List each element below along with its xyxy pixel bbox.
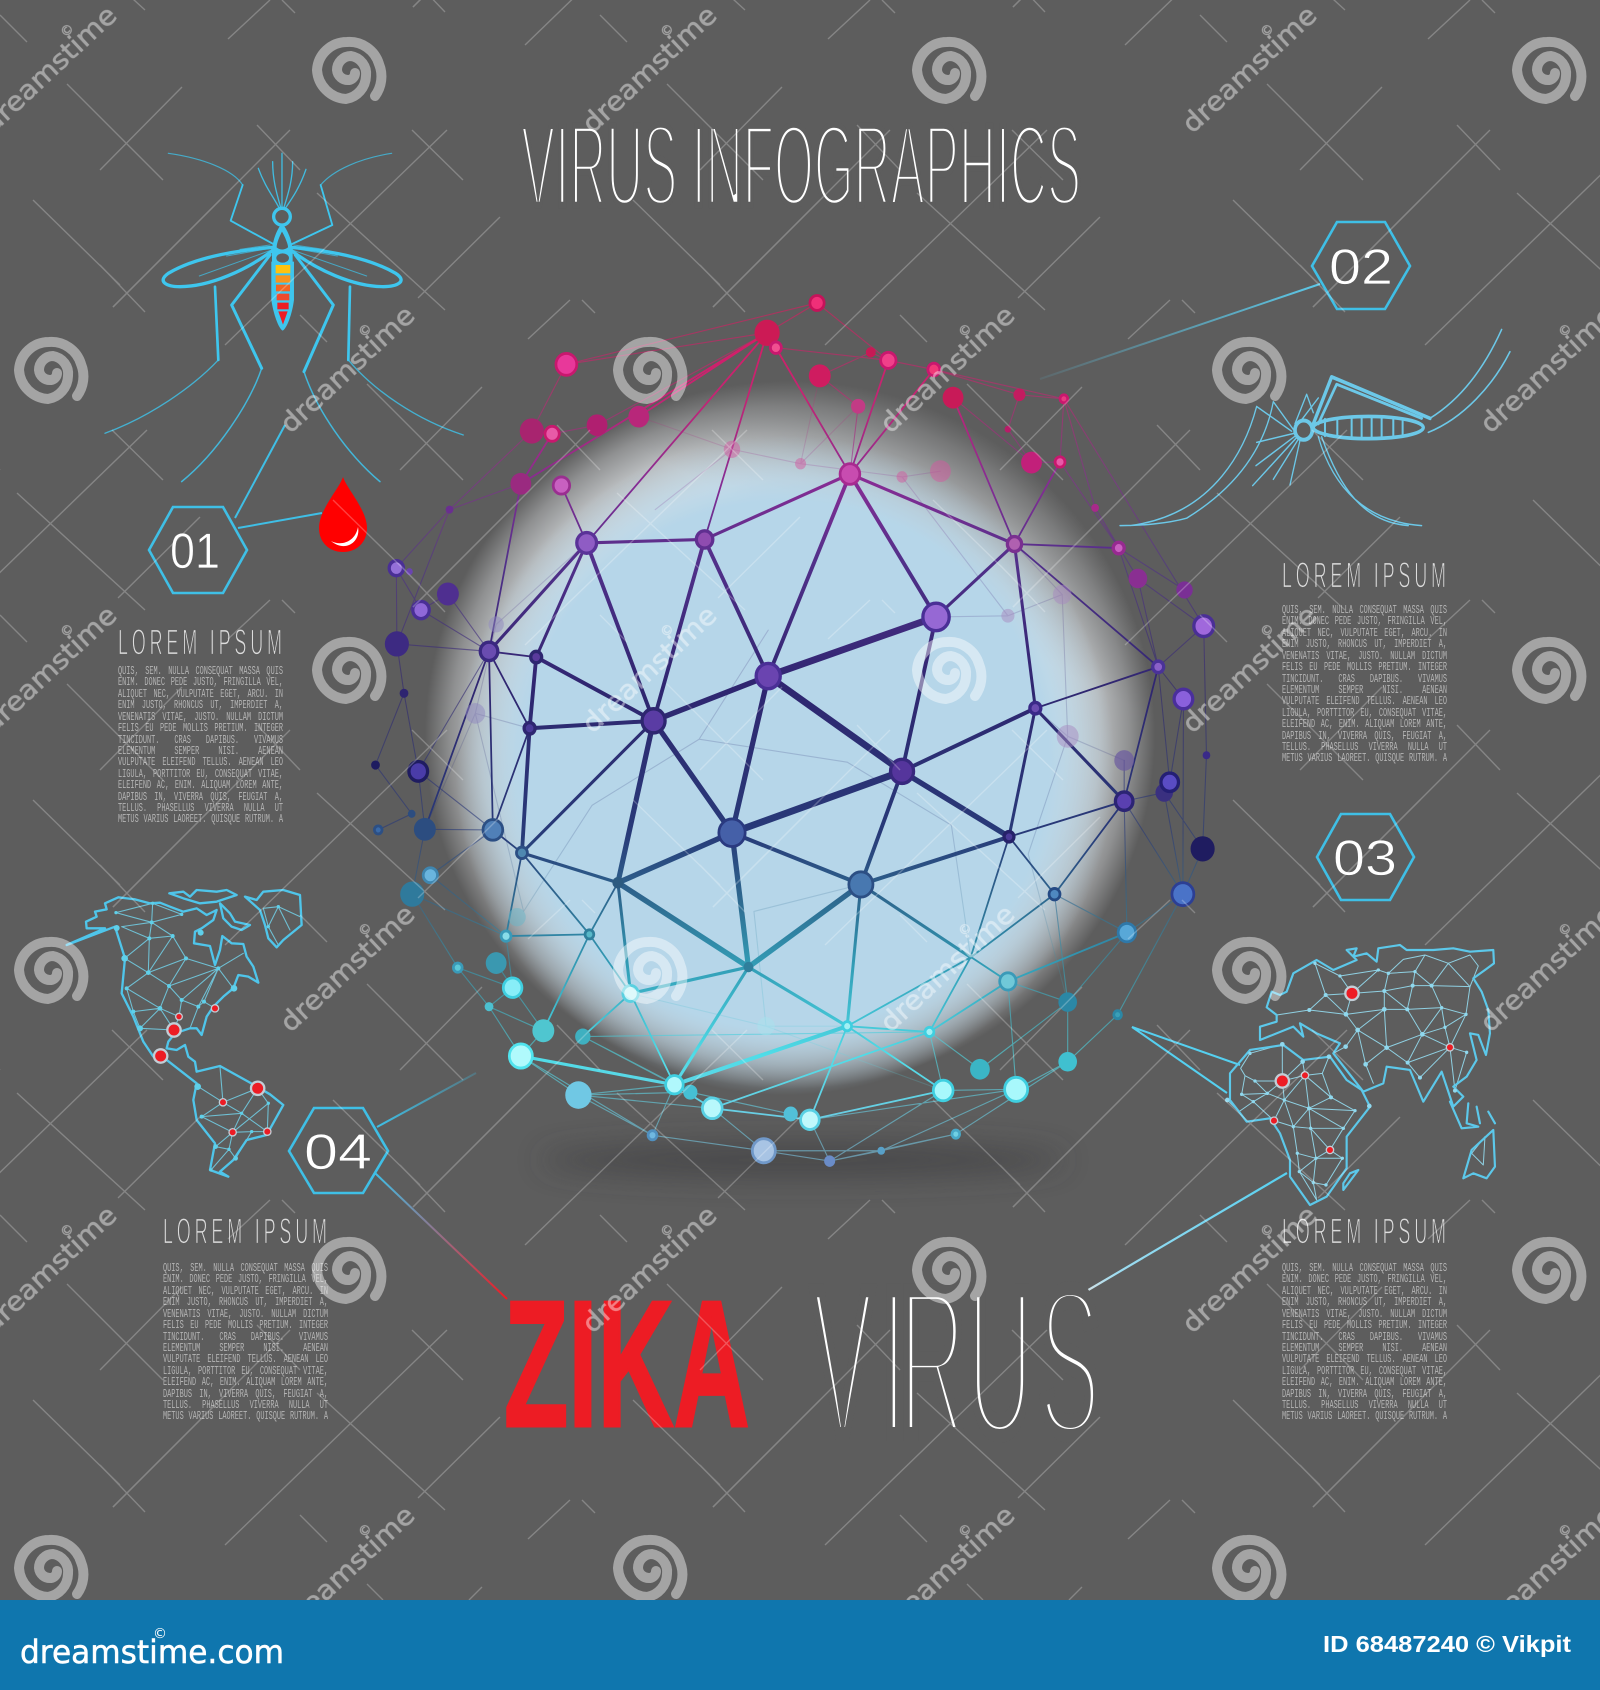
badge 04: 04 [304, 1124, 372, 1180]
mosquito head [274, 208, 290, 225]
connector: 01 to drop [238, 513, 322, 528]
front mesh thin lines [425, 333, 1158, 1120]
title: ZIKA: ZIKA [504, 1265, 750, 1465]
connector: map to virus title [1073, 1173, 1287, 1299]
text block: bottom right body: ELEIFEND AC, ENIM. ALIQUAM LOREM ANTE, [1282, 1376, 1447, 1389]
sphere ground shadow [541, 1143, 1065, 1177]
side mosquito back legs [1318, 437, 1422, 526]
side mosquito body [1313, 416, 1423, 439]
text block: right top body: ENIM JUSTO, RHONCUS UT, IMPERDIET A, [1282, 638, 1447, 651]
text block: left body: VENENATIS VITAE, JUSTO. NULLAM DICTUM [118, 711, 283, 724]
text block: right top body: VULPUTATE ELEIFEND TELLUS. AENEAN LEO [1282, 695, 1447, 708]
icon: side-view mosquito [1120, 330, 1510, 526]
back mesh lines [425, 376, 1124, 1090]
text block: bottom right body: METUS VARIUS LAOREET. QUISQUE RUTRUM. A [1282, 1410, 1447, 1423]
mosquito mid leg tips [105, 360, 463, 435]
text block: left body: DAPIBUS IN, VIVERRA QUIS, FEUGIAT A, [118, 791, 283, 804]
text block: bottom left body: ENIM JUSTO, RHONCUS UT, IMPERDIET A, [163, 1296, 328, 1309]
watermark wordmarks: © [956, 920, 976, 940]
watermark wordmarks: © [658, 1221, 678, 1241]
watermark wordmarks: © [1556, 1521, 1576, 1541]
badge 01: 01 [170, 523, 220, 579]
heading: Lorem Ipsum right top: LOREM IPSUM [1282, 556, 1450, 596]
text block: left body: FELIS EU PEDE MOLLIS PRETIUM. INTEGER [118, 722, 283, 735]
badge 03 [1317, 814, 1414, 900]
text block: bottom left body: VENENATIS VITAE, JUSTO. NULLAM DICTUM [163, 1308, 328, 1321]
text block: bottom left body: ELEIFEND AC, ENIM. ALIQUAM LOREM ANTE, [163, 1376, 328, 1389]
text block: bottom left body: METUS VARIUS LAOREET. QUISQUE RUTRUM. A [163, 1410, 328, 1423]
text block: left body: TINCIDUNT. CRAS DAPIBUS. VIVAMUS [118, 734, 283, 747]
text block: bottom left body [163, 1262, 328, 1423]
text block: left body: VULPUTATE ELEIFEND TELLUS. AENEAN LEO [118, 756, 283, 769]
mosquito antennae [258, 153, 306, 208]
text block: right top body: DAPIBUS IN, VIVERRA QUIS, FEUGIAT A, [1282, 730, 1447, 743]
watermark wordmarks: © [658, 21, 678, 41]
connector: 03 to map wedge [1132, 1027, 1240, 1093]
text block: bottom left body: ENIM. DONEC PEDE JUSTO, FRINGILLA VEL, [163, 1273, 328, 1286]
sphere glow [425, 381, 1155, 1095]
watermark wordmarks: © [356, 920, 376, 940]
text block: right top body: VENENATIS VITAE, JUSTO. NULLAM DICTUM [1282, 650, 1447, 663]
title: VIRUS: VIRUS [812, 1246, 1100, 1479]
text block: left body: LIGULA, PORTTITOR EU, CONSEQUAT VITAE, [118, 768, 283, 781]
footer logo text: © [153, 1626, 167, 1642]
side mosquito upper legs [1295, 394, 1318, 424]
text block: bottom right body: ENIM JUSTO, RHONCUS UT, IMPERDIET A, [1282, 1296, 1447, 1309]
text block: bottom left body: ELEMENTUM SEMPER NISI. AENEAN [163, 1342, 328, 1355]
text block: right top body: ELEMENTUM SEMPER NISI. AENEAN [1282, 684, 1447, 697]
text block: left body: ALIQUET NEC, VULPUTATE EGET, ARCU. IN [118, 688, 283, 701]
text block: bottom right body [1282, 1262, 1447, 1423]
watermark wordmarks: dreamstime [274, 300, 421, 440]
mosquito hind legs [232, 255, 333, 372]
watermark wordmarks: dreamstime [1176, 0, 1323, 140]
outer mesh lines [375, 303, 1206, 1161]
text block: bottom left body: DAPIBUS IN, VIVERRA QUIS, FEUGIAT A, [163, 1388, 328, 1401]
front mesh thick lines [618, 676, 1009, 967]
mosquito abdomen bands [276, 265, 290, 325]
watermark wordmarks: dreamstime [274, 899, 421, 1039]
watermark wordmarks: © [1258, 21, 1278, 41]
text block: left body: ELEIFEND AC, ENIM. ALIQUAM LOREM ANTE, [118, 779, 283, 792]
badge 03: 03 [1333, 830, 1397, 886]
footer logo text: dreamstime.com [20, 1633, 284, 1671]
side mosquito wings [1313, 377, 1430, 424]
watermark wordmarks: dreamstime [576, 1200, 723, 1340]
connector: 04 to zika [375, 1173, 507, 1299]
text block: bottom left body: TELLUS. PHASELLUS VIVERRA NULLA UT [163, 1399, 328, 1412]
mosquito thorax hole [277, 232, 288, 249]
watermark wordmarks: dreamstime [1176, 1200, 1323, 1340]
title: VIRUS INFOGRAPHICS [521, 100, 1081, 230]
badge 04 [289, 1108, 388, 1193]
Americas network lines [116, 903, 300, 1170]
footer image id credit: ID 68487240 © Vikpit [1323, 1631, 1571, 1657]
Americas outline [67, 890, 302, 1177]
side mosquito head [1295, 421, 1312, 440]
icon: blood drop [319, 477, 367, 552]
connector: 01 to mosquito [235, 425, 285, 518]
map: Americas [67, 890, 302, 1177]
text block: right top body: QUIS, SEM. NULLA CONSEQUAT MASSA QUIS [1282, 604, 1447, 617]
watermark wordmarks: © [1258, 621, 1278, 641]
watermark wordmarks: © [956, 321, 976, 341]
blue nodes [374, 810, 1194, 1019]
watermark wordmarks: dreamstime [274, 1500, 421, 1640]
watermark wordmarks: © [58, 1221, 78, 1241]
front mesh heavy lines [522, 474, 1035, 1085]
icon: top-view mosquito [105, 153, 463, 482]
cyan nodes [453, 930, 1077, 1167]
top pink nodes [510, 295, 1099, 512]
text block: left body: TELLUS. PHASELLUS VIVERRA NULLA UT [118, 802, 283, 815]
Eurasia red hotspots [1270, 987, 1454, 1154]
mosquito abdomen [271, 262, 294, 331]
connector: 02 to sphere [1040, 284, 1320, 379]
watermark wordmarks: dreamstime [1176, 600, 1323, 740]
footer bar [0, 1600, 1600, 1690]
text block: bottom left body: LIGULA, PORTTITOR EU, CONSEQUAT VITAE, [163, 1365, 328, 1378]
badge 02: 02 [1329, 239, 1393, 295]
text block: bottom right body: ELEMENTUM SEMPER NISI. AENEAN [1282, 1342, 1447, 1355]
text block: right top body: ELEIFEND AC, ENIM. ALIQUAM LOREM ANTE, [1282, 718, 1447, 731]
text block: right top body: ALIQUET NEC, VULPUTATE EGET, ARCU. IN [1282, 627, 1447, 640]
text block: left body: ENIM JUSTO, RHONCUS UT, IMPERDIET A, [118, 699, 283, 712]
watermark wordmarks: dreamstime [576, 600, 723, 740]
side mosquito tail legs [1428, 330, 1510, 432]
text block: bottom left body: ALIQUET NEC, VULPUTATE EGET, ARCU. IN [163, 1285, 328, 1298]
side mosquito antennae [1253, 433, 1300, 486]
text block: bottom left body: QUIS, SEM. NULLA CONSEQUAT MASSA QUIS [163, 1262, 328, 1275]
watermark wordmarks: © [356, 1521, 376, 1541]
text block: bottom right body: QUIS, SEM. NULLA CONSEQUAT MASSA QUIS [1282, 1262, 1447, 1275]
watermark wordmarks: © [658, 621, 678, 641]
text block: bottom right body: FELIS EU PEDE MOLLIS PRETIUM. INTEGER [1282, 1319, 1447, 1332]
text block: right top body: TELLUS. PHASELLUS VIVERRA NULLA UT [1282, 741, 1447, 754]
text block: bottom right body: ENIM. DONEC PEDE JUSTO, FRINGILLA VEL, [1282, 1273, 1447, 1286]
text block: bottom left body: TINCIDUNT. CRAS DAPIBUS. VIVAMUS [163, 1331, 328, 1344]
heading: Lorem Ipsum bottom left: LOREM IPSUM [163, 1212, 331, 1252]
watermark wordmarks: dreamstime [874, 300, 1021, 440]
watermark wordmarks: dreamstime [874, 899, 1021, 1039]
text block: bottom left body: FELIS EU PEDE MOLLIS PRETIUM. INTEGER [163, 1319, 328, 1332]
text block: bottom right body: VULPUTATE ELEIFEND TELLUS. AENEAN LEO [1282, 1353, 1447, 1366]
watermark wordmarks: dreamstime [874, 1500, 1021, 1640]
Eurasia outline [1230, 945, 1495, 1205]
text block: left body: METUS VARIUS LAOREET. QUISQUE RUTRUM. A [118, 813, 283, 826]
watermark wordmarks: © [356, 321, 376, 341]
badge 02 [1312, 222, 1410, 309]
watermark wordmarks: © [956, 1521, 976, 1541]
text block: bottom right body: DAPIBUS IN, VIVERRA QUIS, FEUGIAT A, [1282, 1388, 1447, 1401]
badge 01 [149, 507, 247, 593]
text block: left body: ENIM. DONEC PEDE JUSTO, FRINGILLA VEL, [118, 676, 283, 689]
mosquito front legs [231, 185, 332, 245]
text block: bottom right body: TELLUS. PHASELLUS VIVERRA NULLA UT [1282, 1399, 1447, 1412]
side mosquito stripes [1325, 417, 1403, 438]
heading: Lorem Ipsum bottom right: LOREM IPSUM [1282, 1212, 1450, 1252]
watermark wordmarks: © [58, 621, 78, 641]
text block: right top body: METUS VARIUS LAOREET. QUISQUE RUTRUM. A [1282, 752, 1447, 765]
text block: bottom right body: ALIQUET NEC, VULPUTATE EGET, ARCU. IN [1282, 1285, 1447, 1298]
text block: right top body: TINCIDUNT. CRAS DAPIBUS. VIVAMUS [1282, 673, 1447, 686]
pale back nodes [465, 441, 1079, 1035]
Americas cyan nodes [114, 902, 280, 1172]
text block: left body: ELEMENTUM SEMPER NISI. AENEAN [118, 745, 283, 758]
text block: left body [118, 665, 283, 826]
side mosquito wing inner [1318, 384, 1422, 424]
watermark wordmarks: © [1258, 1221, 1278, 1241]
text block: left body: QUIS, SEM. NULLA CONSEQUAT MASSA QUIS [118, 665, 283, 678]
mosquito front leg tips [168, 153, 392, 185]
text block: right top body: FELIS EU PEDE MOLLIS PRETIUM. INTEGER [1282, 661, 1447, 674]
virus network sphere [371, 295, 1215, 1167]
front mesh medium lines [489, 474, 1124, 1085]
Eurasia cyan nodes [1225, 962, 1468, 1187]
mosquito mid legs [215, 287, 350, 360]
connector: 04 to sphere [377, 1073, 476, 1127]
text block: bottom left body: VULPUTATE ELEIFEND TELLUS. AENEAN LEO [163, 1353, 328, 1366]
purple nodes [371, 506, 1215, 861]
mosquito hind leg tips [182, 368, 380, 482]
side mosquito front legs [1120, 402, 1293, 526]
mosquito wing veins [199, 245, 367, 276]
mosquito thorax [272, 223, 293, 263]
text block: bottom right body: VENENATIS VITAE, JUSTO. NULLAM DICTUM [1282, 1308, 1447, 1321]
text block: right top body: ENIM. DONEC PEDE JUSTO, FRINGILLA VEL, [1282, 615, 1447, 628]
front mesh heaviest lines [732, 617, 936, 833]
text block: bottom right body: LIGULA, PORTTITOR EU, CONSEQUAT VITAE, [1282, 1365, 1447, 1378]
mosquito wings [163, 247, 401, 287]
text block: right top body [1282, 604, 1447, 765]
watermark wordmarks: dreamstime [576, 0, 723, 140]
watermark wordmarks: © [58, 21, 78, 41]
text block: bottom right body: TINCIDUNT. CRAS DAPIBUS. VIVAMUS [1282, 1331, 1447, 1344]
Americas red hotspots [154, 1005, 271, 1136]
mosquito abdomen hole [276, 253, 289, 263]
watermark wordmarks: © [1556, 920, 1576, 940]
watermark wordmarks: © [1556, 321, 1576, 341]
text block: right top body: LIGULA, PORTTITOR EU, CONSEQUAT VITAE, [1282, 707, 1447, 720]
heading: Lorem Ipsum left: LOREM IPSUM [118, 623, 286, 663]
Eurasia network lines [1227, 955, 1485, 1200]
map: Eurasia and Africa [1225, 945, 1495, 1205]
